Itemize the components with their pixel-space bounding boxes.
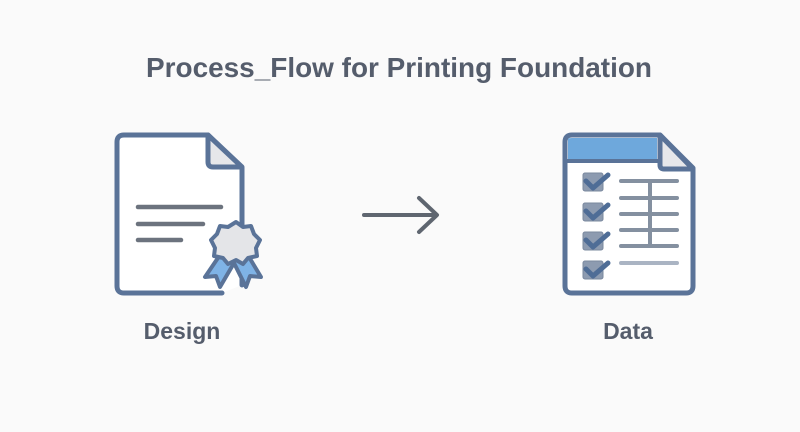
label: Data: Data	[603, 318, 653, 344]
icon: data checklist document	[565, 135, 693, 293]
title: Process_Flow for Printing Foundation	[146, 52, 652, 83]
label: Design: Design	[144, 318, 220, 344]
icon: design document with award ribbon	[117, 135, 261, 293]
arrow	[364, 198, 437, 232]
